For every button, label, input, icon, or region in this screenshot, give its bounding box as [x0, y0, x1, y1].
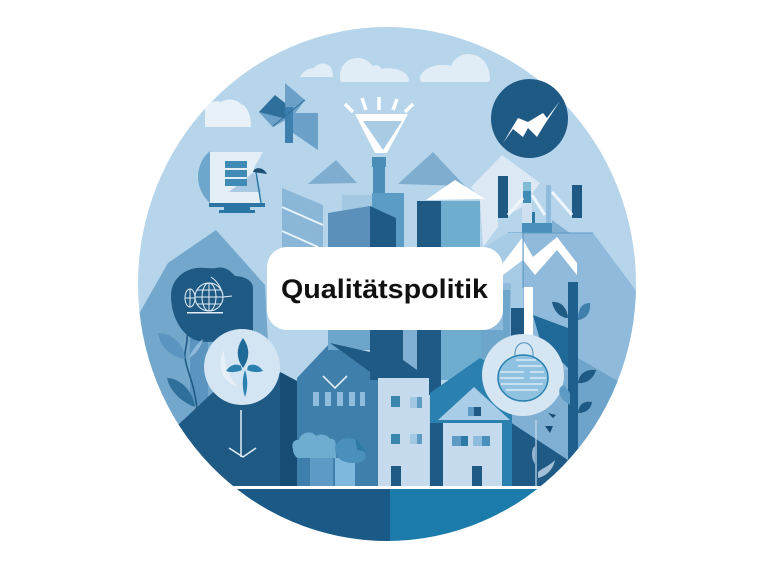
house: center left — [297, 330, 503, 486]
lower right background — [503, 233, 618, 490]
plant left — [158, 333, 203, 408]
clouds — [205, 54, 490, 127]
mountains — [308, 152, 465, 186]
icon: pinwheel — [259, 83, 318, 150]
ground — [234, 486, 540, 541]
icon: computer monitor — [198, 151, 267, 213]
arrow: down — [229, 410, 256, 457]
infographic: city in a circle — [138, 27, 636, 541]
grass and pole — [532, 413, 556, 486]
light mountain — [471, 155, 540, 247]
icon: funnel lamp — [345, 97, 413, 195]
title card — [267, 247, 503, 330]
icon: lock circle — [482, 334, 564, 416]
central buildings — [282, 180, 485, 251]
white zigzag — [503, 237, 577, 275]
right slope — [480, 233, 640, 450]
circular illustration — [130, 20, 650, 559]
icon: globe in dark cloud — [171, 267, 253, 342]
left mountain — [130, 230, 270, 425]
light gap — [268, 330, 328, 400]
title card: Qualitätspolitik — [281, 274, 489, 304]
tree clouds — [292, 432, 367, 463]
building: white tower — [378, 378, 429, 486]
dark building — [178, 373, 297, 486]
antenna bars — [498, 176, 582, 233]
house: right — [430, 358, 512, 486]
icon: chart badge — [491, 79, 568, 158]
plant right — [552, 302, 596, 413]
icon: wind turbine circle — [204, 329, 280, 405]
